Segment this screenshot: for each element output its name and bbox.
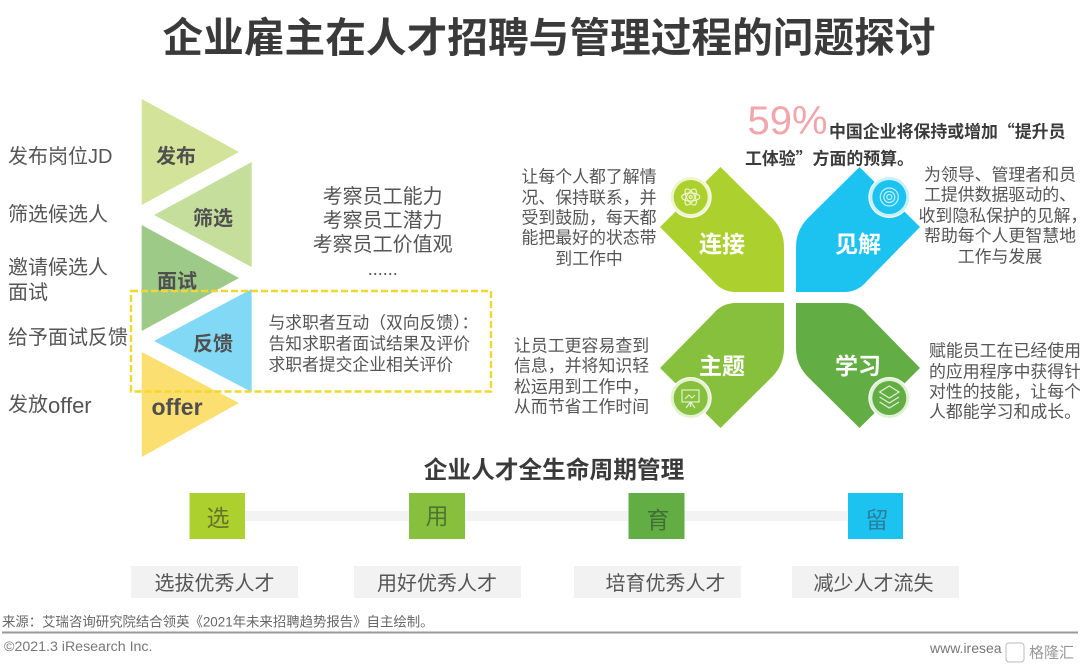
label: 选拔优秀人才: 选拔优秀人才 bbox=[154, 572, 274, 595]
panel: recruitment steps bbox=[8, 99, 491, 457]
text: 见解 description: 工提供数据驱动的、 bbox=[924, 186, 1076, 204]
icon: layers bbox=[880, 386, 899, 408]
panel: 学习: 学习 bbox=[835, 353, 881, 379]
callout: 59%: 工体验”方面的预算。 bbox=[745, 144, 914, 170]
text: assessment: ...... bbox=[368, 259, 398, 279]
text: 见解 description: 帮助每个人更智慧地 bbox=[924, 226, 1076, 246]
icon: target bbox=[880, 188, 898, 206]
triangle: offer: offer bbox=[151, 394, 203, 420]
icon: presentation board bbox=[682, 390, 699, 408]
heading: lifecycle: 企业人才全生命周期管理 bbox=[424, 456, 685, 484]
triangle: 筛选 bbox=[154, 162, 252, 267]
text: 连接 description: 到工作中 bbox=[555, 250, 623, 268]
step: 育 bbox=[628, 493, 684, 539]
callout: 59%: 59% bbox=[748, 99, 828, 143]
text: 学习 description bbox=[929, 340, 1080, 422]
step: 留: 留 bbox=[866, 507, 888, 533]
triangle: 反馈 bbox=[154, 289, 252, 392]
label: 用好优秀人才: 用好优秀人才 bbox=[377, 572, 497, 595]
text: 见解 description: 工作与发展 bbox=[958, 248, 1042, 266]
text: 连接 description: 让每个人都了解情 bbox=[521, 168, 657, 186]
text: 连接 description: 受到鼓励，每天都 bbox=[521, 208, 657, 228]
panel: 主题: 主题 bbox=[699, 353, 745, 379]
panel: 学习 bbox=[796, 303, 920, 428]
text: 见解 description bbox=[919, 166, 1080, 266]
triangle: offer bbox=[142, 352, 239, 457]
triangle: 筛选: 筛选 bbox=[193, 206, 233, 230]
title: 企业雇主在人才招聘与管理过程的问题探讨 bbox=[162, 15, 936, 61]
step: 留 bbox=[848, 493, 903, 539]
triangle: 反馈: 反馈 bbox=[193, 332, 233, 356]
dashed highlight box bbox=[131, 291, 491, 392]
text: 主题 description: 松运用到工作中， bbox=[514, 378, 649, 396]
panel: 见解: 见解 bbox=[835, 231, 881, 257]
text: assessment: 考察员工价值观 bbox=[313, 233, 453, 256]
step labels bbox=[8, 145, 128, 418]
text: 连接 description: 况、保持联系，并 bbox=[521, 188, 657, 208]
copyright: ©2021.3 iResearch Inc. bbox=[4, 639, 152, 655]
step labels: 筛选候选人 bbox=[8, 203, 108, 226]
text: 连接 description: 能把最好的状态带 bbox=[521, 228, 657, 248]
text: 主题 description bbox=[514, 336, 649, 416]
step: 选: 选 bbox=[206, 505, 230, 531]
text: 见解 description: 为领导、管理者和员 bbox=[924, 166, 1076, 184]
text: 学习 description: 赋能员工在已经使用 bbox=[929, 340, 1080, 360]
triangle: 发布: 发布 bbox=[156, 145, 196, 168]
step: 用: 用 bbox=[426, 503, 448, 529]
text: 学习 description: 的应用程序中获得针 bbox=[929, 362, 1080, 382]
text: 学习 description: 人都能学习和成长。 bbox=[929, 402, 1080, 422]
text: 主题 description: 信息，并将知识轻 bbox=[514, 356, 649, 376]
step labels: 发放offer bbox=[8, 392, 92, 418]
watermark bbox=[1006, 643, 1074, 662]
icon: atom bbox=[682, 187, 700, 207]
website: www.iresea bbox=[929, 640, 1002, 656]
text: feedback: 与求职者互动（双向反馈）： bbox=[268, 314, 478, 332]
triangle: 面试 bbox=[142, 225, 239, 331]
text: feedback: 告知求职者面试结果及评价 bbox=[268, 334, 470, 354]
step: 育: 育 bbox=[646, 507, 670, 533]
label: 培育优秀人才 bbox=[574, 566, 741, 598]
step labels: 发布岗位JD bbox=[8, 145, 112, 168]
label: 选拔优秀人才 bbox=[131, 566, 298, 598]
callout: 59% bbox=[745, 99, 1066, 170]
text: 连接 description bbox=[521, 168, 657, 268]
step labels: 给予面试反馈 bbox=[8, 326, 128, 349]
panel: 连接 bbox=[660, 167, 784, 292]
triangle: 发布 bbox=[142, 99, 239, 205]
text: assessment bbox=[313, 185, 453, 279]
text: feedback bbox=[268, 314, 478, 374]
text: 学习 description: 对性的技能，让每个 bbox=[929, 382, 1080, 402]
text: assessment: 考察员工能力 bbox=[323, 185, 443, 208]
text: feedback: 求职者提交企业相关评价 bbox=[268, 356, 453, 374]
text: 主题 description: 让员工更容易查到 bbox=[514, 336, 649, 356]
watermark: 格隆汇 bbox=[1029, 644, 1074, 662]
label: 减少人才流失: 减少人才流失 bbox=[814, 572, 934, 595]
panel: 连接: 连接 bbox=[699, 231, 745, 257]
label: 用好优秀人才 bbox=[354, 566, 521, 598]
step: 选 bbox=[190, 493, 245, 539]
panel: 主题 bbox=[660, 303, 784, 428]
triangle: 面试: 面试 bbox=[157, 270, 197, 293]
lifecycle timeline bbox=[190, 493, 903, 539]
label: 减少人才流失 bbox=[792, 566, 959, 598]
text: 主题 description: 从而节省工作时间 bbox=[514, 398, 649, 416]
source note: 来源：艾瑞咨询研究院结合领英《2021年未来招聘趋势报告》自主绘制。 bbox=[2, 614, 434, 630]
step labels: 邀请候选人 bbox=[8, 256, 108, 279]
step: 用 bbox=[409, 493, 465, 539]
text: assessment: 考察员工潜力 bbox=[323, 209, 443, 232]
step labels: 面试 bbox=[8, 281, 48, 304]
panel: 见解 bbox=[796, 167, 920, 292]
callout: 59%: 中国企业将保持或增加“提升员 bbox=[829, 118, 1066, 142]
label: 培育优秀人才: 培育优秀人才 bbox=[606, 572, 726, 595]
